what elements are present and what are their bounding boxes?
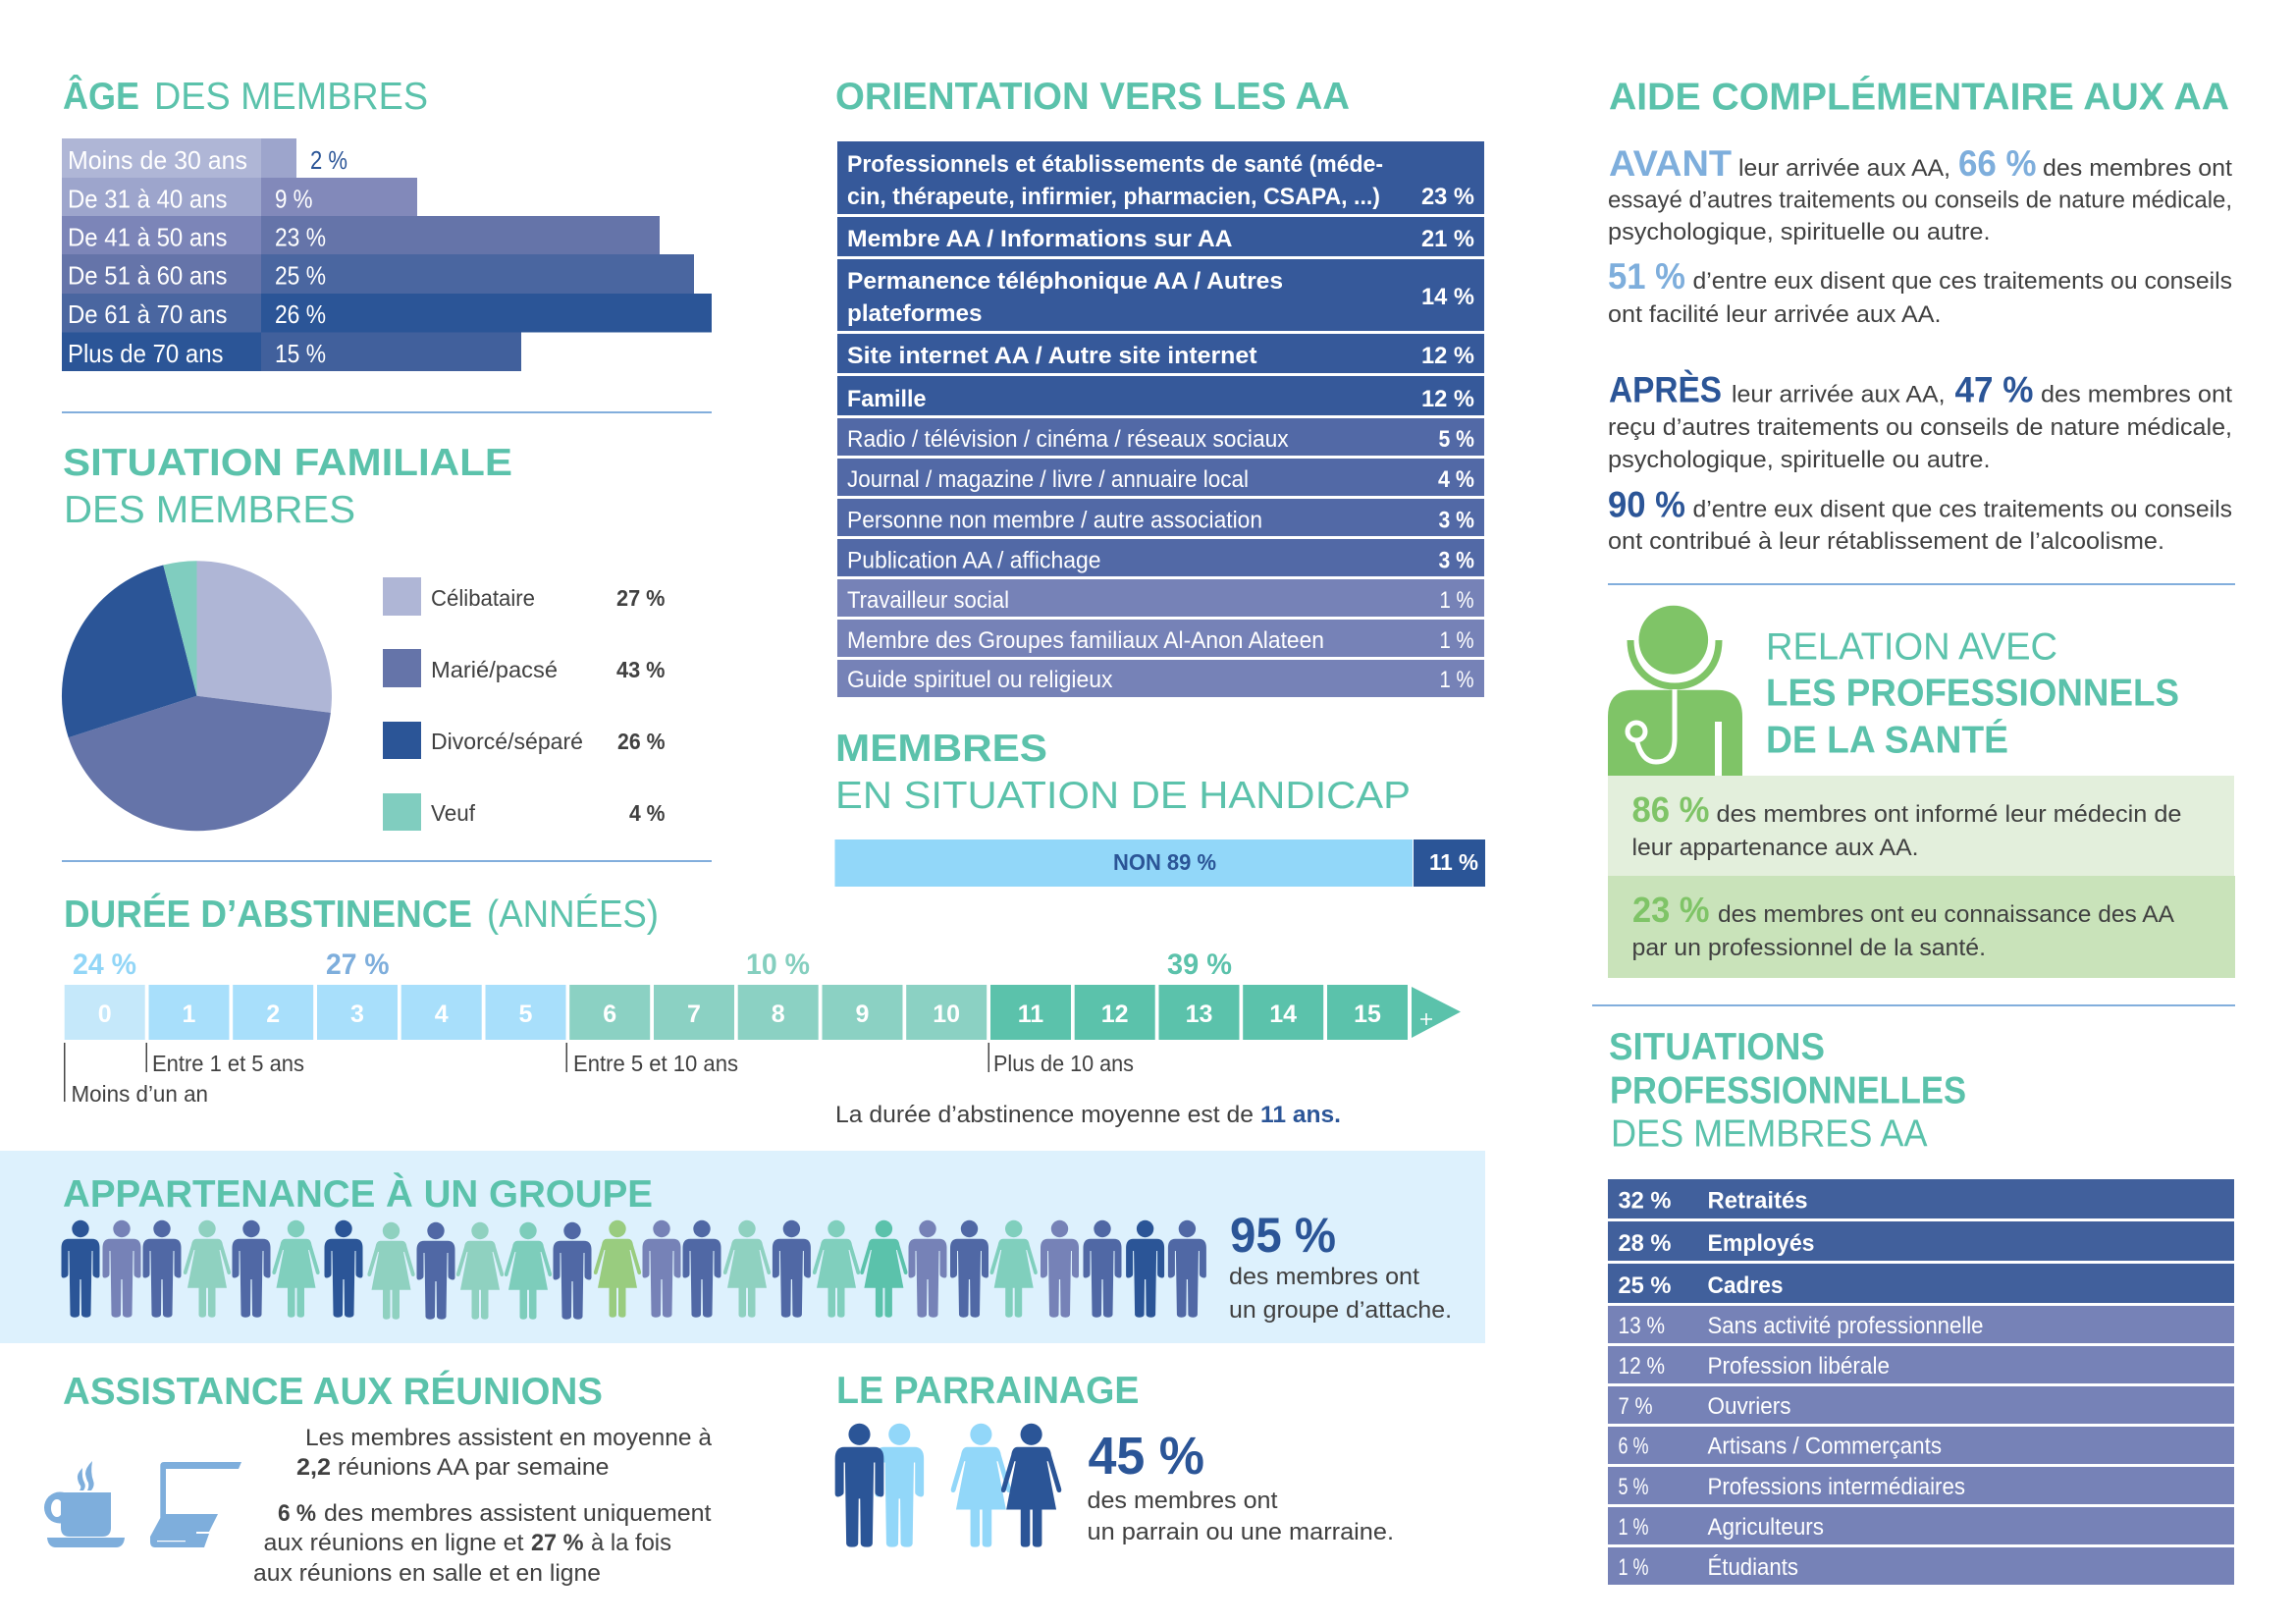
- text: réunions: à la fois: [591, 1530, 671, 1556]
- table: orientation: Publication AA / affichage: [847, 548, 1101, 573]
- heading: situations professionnelles: [1609, 1026, 1966, 1155]
- bar chart: tranches d'âge: 15 %: [275, 339, 326, 368]
- text block: après: APRÈS: [1609, 369, 1722, 410]
- legend: situation familiale: 27 %: [616, 585, 666, 611]
- table: orientation: Membre AA / Informations sur AA: [847, 226, 1233, 252]
- tick labels: Moins d’un an: [71, 1081, 208, 1107]
- text: réunions: des membres assistent uniquement: [324, 1500, 712, 1527]
- table: situations professionnelles: 12 %: [1618, 1353, 1665, 1380]
- timeline: years 0 to 15: 0: [98, 1001, 112, 1028]
- table: situations professionnelles: Étudiants: [1708, 1554, 1798, 1581]
- text: réunions: réunions AA par semaine: [338, 1454, 609, 1481]
- table: situations professionnelles: 1 %: [1618, 1514, 1649, 1541]
- bar chart: tranches d'âge: 26 %: [275, 299, 326, 329]
- text block: après: reçu d’autres traitements ou conseils de nature médicale,: [1608, 414, 2232, 441]
- text: réunions: aux réunions en ligne et: [263, 1530, 524, 1556]
- text block: avant: AVANT: [1609, 143, 1732, 184]
- heading: durée d'abstinence: DURÉE D’ABSTINENCE: [64, 893, 472, 936]
- legend: situation familiale: 26 %: [617, 729, 666, 754]
- table: situations professionnelles: Cadres: [1708, 1272, 1783, 1299]
- heading: relation avec les professionnels: [1766, 626, 2179, 762]
- bar chart: tranches d'âge: 23 %: [275, 222, 326, 251]
- heading: situations professionnelles: PROFESSIONNELLES: [1610, 1070, 1966, 1111]
- table: orientation: 5 %: [1439, 426, 1474, 453]
- stat: 95 %: des membres ont: [1229, 1264, 1419, 1290]
- bar chart: tranches d'âge: 25 %: [275, 261, 326, 291]
- panel: appartenance à un groupe: [0, 1151, 1485, 1343]
- panel: 23 %: 23 %: [1632, 890, 1710, 930]
- heading: situation familiale: DES MEMBRES: [64, 489, 355, 531]
- section: situations professionnelles: [1608, 1026, 2234, 1585]
- stat: 95 %: 95 %: [1230, 1208, 1336, 1263]
- table: orientation: Journal / magazine / livre / annuaire local: [847, 466, 1249, 493]
- timeline: years 0 to 15: 9: [856, 1001, 869, 1028]
- table: orientation: Famille: [847, 386, 927, 412]
- section: aide complémentaire: [1608, 75, 2232, 555]
- text block: après: 47 %: [1955, 369, 2034, 410]
- bar chart: tranches d'âge: 9 %: [275, 185, 312, 214]
- table: orientation: Professionnels et établissements de santé (méde-: [847, 151, 1383, 178]
- stat: 45 %: un parrain ou une marraine.: [1088, 1519, 1394, 1545]
- text: réunions: 6 %: [278, 1500, 316, 1527]
- icon: doctor with stethoscope: [1608, 606, 1742, 776]
- text block: avant: 51 %: [1608, 256, 1685, 297]
- timeline: years 0 to 15: 8: [772, 1001, 785, 1028]
- table: orientation: 21 %: [1421, 226, 1474, 252]
- section: orientation vers les AA: [835, 76, 1484, 697]
- text block: avant: d’entre eux disent que ces traitements ou conseils: [1692, 268, 2232, 295]
- timeline: years 0 to 15: 7: [687, 1001, 701, 1028]
- text block: avant: ont facilité leur arrivée aux AA.: [1608, 301, 1942, 328]
- text block: avant: 66 %: [1958, 143, 2036, 184]
- table: situations professionnelles: Agriculteurs: [1708, 1514, 1824, 1541]
- table: orientation: Membre des Groupes familiaux Al-Anon Alateen: [847, 627, 1324, 654]
- table: situations professionnelles: [1608, 1179, 2234, 1585]
- text block: avant: des membres ont: [2043, 155, 2232, 182]
- text block: après: des membres ont: [2041, 381, 2232, 408]
- stacked bar: handicap: [834, 839, 1485, 887]
- tick labels: Plus de 10 ans: [993, 1051, 1134, 1076]
- table: orientation: Permanence téléphonique AA / Autres: [847, 268, 1283, 295]
- heading: situation familiale: SITUATION FAMILIALE: [63, 442, 512, 484]
- table: situations professionnelles: Sans activité professionnelle: [1708, 1313, 1983, 1339]
- tick labels: [64, 1043, 1134, 1107]
- heading: âge des membres: ÂGE: [63, 75, 139, 118]
- text: réunions: Les membres assistent en moyenne à: [305, 1425, 713, 1451]
- timeline: years 0 to 15: 3: [350, 1001, 364, 1028]
- text block: après: [1608, 369, 2232, 555]
- table: orientation: 12 %: [1421, 343, 1474, 369]
- text block: avant: psychologique, spirituelle ou autre.: [1608, 219, 1991, 245]
- stacked bar: handicap: NON 89 %: [1113, 849, 1216, 875]
- table: orientation: Site internet AA / Autre site internet: [847, 343, 1256, 369]
- stat: 45 %: des membres ont: [1088, 1488, 1278, 1514]
- table: orientation: 1 %: [1439, 667, 1474, 693]
- percent labels: 27 %: [326, 948, 389, 981]
- timeline: years 0 to 15: 11: [1018, 1001, 1043, 1028]
- section: situation familiale: [62, 442, 666, 831]
- table: orientation: 3 %: [1439, 548, 1474, 573]
- text: réunions: 27 %: [531, 1530, 583, 1556]
- pie chart: situation familiale: [62, 561, 332, 831]
- panel: 23 %: des membres ont eu connaissance des AA: [1718, 901, 2174, 928]
- legend: situation familiale: 43 %: [616, 657, 666, 682]
- table: orientation: cin, thérapeute, infirmier, pharmacien, CSAPA, ...): [847, 184, 1380, 210]
- panel: 23 %: par un professionnel de la santé.: [1631, 935, 1986, 961]
- heading: âge des membres: DES MEMBRES: [154, 76, 428, 118]
- heading: orientation vers les AA: ORIENTATION VERS LES AA: [835, 76, 1350, 118]
- text block: après: ont contribué à leur rétablissement de l’alcoolisme.: [1608, 528, 2164, 555]
- table: situations professionnelles: 32 %: [1618, 1188, 1671, 1214]
- text: réunions: 2,2: [296, 1454, 331, 1481]
- bar chart: tranches d'âge: 2 %: [310, 145, 347, 175]
- heading: situation de handicap: MEMBRES: [835, 728, 1047, 770]
- section: assistance aux réunions: [44, 1370, 713, 1587]
- text block: après: psychologique, spirituelle ou autre.: [1608, 447, 1991, 473]
- heading: assistance aux réunions: ASSISTANCE AUX RÉUNIONS: [63, 1370, 603, 1413]
- bar chart: tranches d'âge: De 51 à 60 ans: [68, 261, 228, 291]
- table: orientation: 1 %: [1439, 627, 1474, 654]
- table: orientation: 1 %: [1439, 587, 1474, 614]
- heading: aide complémentaire: AIDE COMPLÉMENTAIRE AUX AA: [1609, 75, 2229, 118]
- stat: 45 %: [1088, 1427, 1394, 1545]
- text block: avant: essayé d’autres traitements ou conseils de nature médicale,: [1608, 187, 2232, 214]
- heading: situations professionnelles: DES MEMBRES AA: [1611, 1113, 1928, 1155]
- heading: situation de handicap: [835, 728, 1411, 817]
- table: situations professionnelles: 5 %: [1618, 1474, 1649, 1500]
- section: relation avec les professionnels de la santé: [1608, 606, 2235, 978]
- heading: situation familiale: [63, 442, 512, 531]
- arrow: plus de 15 ans: [1412, 987, 1461, 1038]
- panel: 86 %: [1608, 776, 2234, 876]
- table: orientation: Guide spirituel ou religieux: [847, 667, 1113, 693]
- section: situation de handicap: [834, 728, 1485, 887]
- timeline: years 0 to 15: 14: [1269, 1001, 1297, 1028]
- timeline: years 0 to 15: 13: [1186, 1001, 1212, 1028]
- panel: 86 %: 86 %: [1631, 789, 1710, 830]
- text block: avant: [1608, 143, 2232, 328]
- table: orientation: plateformes: [847, 300, 982, 327]
- pictogram: parrain et marraine: [835, 1424, 1061, 1547]
- table: orientation: 14 %: [1421, 284, 1474, 310]
- table: situations professionnelles: 1 %: [1618, 1554, 1649, 1581]
- heading: relation avec les professionnels: DE LA SANTÉ: [1766, 719, 2008, 762]
- text: réunions: aux réunions en salle et en ligne: [253, 1560, 601, 1587]
- timeline: years 0 to 15: 4: [435, 1001, 449, 1028]
- panel: 86 %: leur appartenance aux AA.: [1631, 835, 1918, 861]
- icon: laptop: [150, 1462, 241, 1547]
- timeline: years 0 to 15: 6: [603, 1001, 616, 1028]
- stat: 95 %: un groupe d’attache.: [1229, 1297, 1452, 1324]
- text: durée moyenne: La durée d’abstinence moyenne est de: [835, 1102, 1254, 1128]
- timeline: years 0 to 15: 12: [1101, 1001, 1129, 1028]
- legend: situation familiale: Marié/pacsé: [431, 657, 558, 682]
- legend: situation familiale: Célibataire: [431, 585, 535, 611]
- tick labels: Entre 1 et 5 ans: [152, 1051, 304, 1076]
- table: orientation: 23 %: [1421, 184, 1474, 210]
- heading: relation avec les professionnels: LES PROFESSIONNELS: [1766, 672, 2179, 715]
- bar chart: tranches d'âge: De 61 à 70 ans: [68, 299, 228, 329]
- table: situations professionnelles: 6 %: [1618, 1434, 1649, 1459]
- table: orientation: Travailleur social: [847, 587, 1009, 614]
- section: durée d'abstinence: [64, 893, 1461, 1128]
- section: le parrainage: [835, 1370, 1394, 1547]
- table: situations professionnelles: Retraités: [1708, 1188, 1808, 1214]
- stacked bar: handicap: 11 %: [1429, 849, 1478, 875]
- pictogram row: 26 members: [61, 1220, 1206, 1320]
- table: situations professionnelles: Employés: [1708, 1230, 1814, 1257]
- table: situations professionnelles: 13 %: [1618, 1313, 1665, 1339]
- table: orientation: Radio / télévision / cinéma / réseaux sociaux: [847, 426, 1289, 453]
- table: orientation: 12 %: [1421, 386, 1474, 412]
- percent labels: 24 %: [73, 948, 136, 981]
- panel: 86 %: des membres ont informé leur médecin de: [1716, 801, 2181, 828]
- legend: situation familiale: Veuf: [431, 800, 476, 826]
- heading: le parrainage: LE PARRAINAGE: [836, 1370, 1139, 1412]
- timeline: years 0 to 15: 2: [266, 1001, 280, 1028]
- table: situations professionnelles: Professions intermédiaires: [1708, 1474, 1965, 1500]
- bar chart: tranches d'âge: [62, 138, 712, 371]
- timeline: years 0 to 15: [65, 985, 1408, 1040]
- section: âge des membres: [62, 75, 712, 371]
- heading: relation avec les professionnels: RELATION AVEC: [1766, 626, 2057, 668]
- timeline: years 0 to 15: 5: [519, 1001, 533, 1028]
- heading: situations professionnelles: SITUATIONS: [1609, 1026, 1825, 1068]
- text block: après: leur arrivée aux AA,: [1732, 381, 1946, 408]
- stat: 45 %: 45 %: [1088, 1427, 1204, 1486]
- bar chart: tranches d'âge: Moins de 30 ans: [68, 145, 247, 175]
- percent labels: [73, 948, 1232, 981]
- legend: situation familiale: Divorcé/séparé: [431, 729, 583, 754]
- text: réunions: [253, 1425, 713, 1587]
- panel: 23 %: [1608, 876, 2235, 978]
- text block: après: d’entre eux disent que ces traitements ou conseils: [1692, 497, 2232, 522]
- heading: appartenance à un groupe: APPARTENANCE À UN GROUPE: [63, 1172, 653, 1216]
- percent labels: 10 %: [746, 948, 810, 981]
- legend: situation familiale: [383, 577, 666, 831]
- bar chart: tranches d'âge: De 41 à 50 ans: [68, 222, 228, 251]
- table: orientation: 3 %: [1439, 507, 1474, 534]
- timeline: years 0 to 15: 1: [183, 1001, 196, 1028]
- table: situations professionnelles: 7 %: [1618, 1393, 1653, 1420]
- table: situations professionnelles: 25 %: [1618, 1272, 1671, 1299]
- text block: avant: leur arrivée aux AA,: [1738, 155, 1950, 182]
- table: situations professionnelles: Profession libérale: [1708, 1353, 1890, 1380]
- bar chart: tranches d'âge: Plus de 70 ans: [68, 339, 224, 368]
- timeline: years 0 to 15: 15: [1354, 1001, 1381, 1028]
- tick labels: Entre 5 et 10 ans: [573, 1051, 738, 1076]
- table: orientation: [837, 141, 1484, 697]
- table: orientation: Personne non membre / autre association: [847, 507, 1262, 534]
- text: durée moyenne: 11 ans.: [1260, 1102, 1341, 1128]
- table: orientation: 4 %: [1438, 466, 1474, 493]
- stat: 95 %: [1229, 1208, 1452, 1324]
- heading: durée d'abstinence: (ANNÉES): [487, 893, 659, 936]
- table: situations professionnelles: 28 %: [1618, 1230, 1671, 1257]
- bar chart: tranches d'âge: De 31 à 40 ans: [68, 185, 228, 214]
- legend: situation familiale: 4 %: [629, 800, 666, 826]
- table: situations professionnelles: Ouvriers: [1708, 1393, 1790, 1420]
- table: situations professionnelles: Artisans / Commerçants: [1708, 1434, 1942, 1459]
- timeline: years 0 to 15: 10: [933, 1001, 960, 1028]
- percent labels: 39 %: [1167, 948, 1232, 981]
- heading: situation de handicap: EN SITUATION DE HANDICAP: [835, 775, 1411, 817]
- text block: après: 90 %: [1608, 485, 1685, 524]
- icon: coffee cup: [44, 1461, 125, 1547]
